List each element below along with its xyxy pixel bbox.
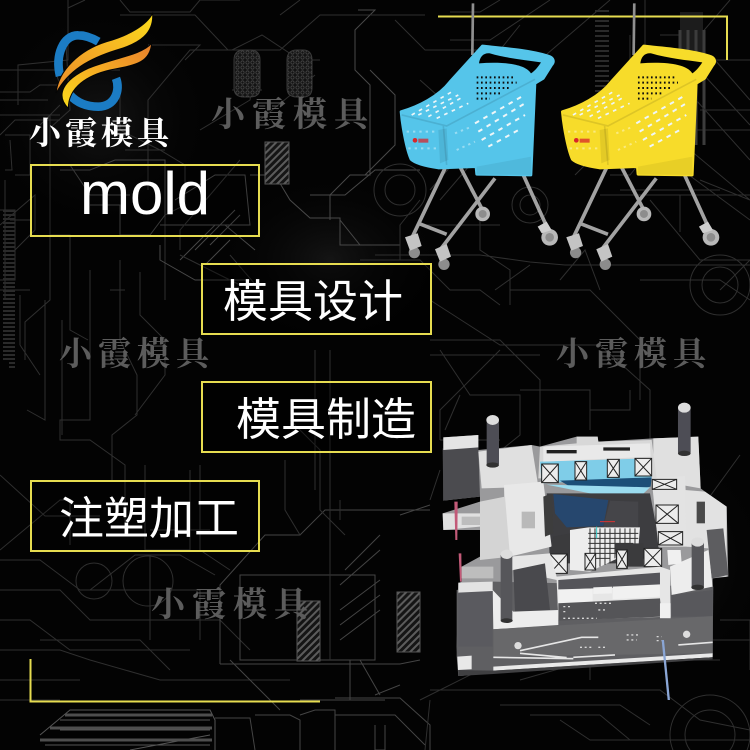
box: injection moulding	[31, 481, 259, 551]
watermark: middle right: 小霞模具	[556, 328, 712, 375]
corner line: bottom left	[30, 659, 320, 702]
box: mould manufacturing	[202, 382, 431, 452]
corner line: top right	[438, 16, 727, 60]
watermark: bottom centre: 小霞模具	[151, 577, 315, 626]
watermark: middle left: 小霞模具	[59, 328, 215, 375]
icon: blue ring	[59, 35, 118, 107]
box: mold: mold	[80, 160, 210, 227]
logo wordmark: 小霞模具	[29, 108, 173, 154]
box: mold	[31, 160, 259, 236]
box: mould design: 模具设计	[223, 276, 403, 327]
box: mould manufacturing: 模具制造	[236, 394, 416, 445]
hex panels	[234, 50, 260, 97]
watermark: top centre: 小霞模具	[211, 87, 375, 136]
box: mould design	[202, 264, 431, 334]
icon: yellow wing	[62, 43, 152, 108]
box: injection moulding: 注塑加工	[59, 493, 239, 544]
logo	[29, 13, 173, 154]
icon: orange wing	[56, 13, 153, 93]
mould 3D drawing	[443, 403, 728, 700]
blue shopping cart	[401, 3, 558, 270]
yellow shopping cart	[562, 3, 719, 270]
